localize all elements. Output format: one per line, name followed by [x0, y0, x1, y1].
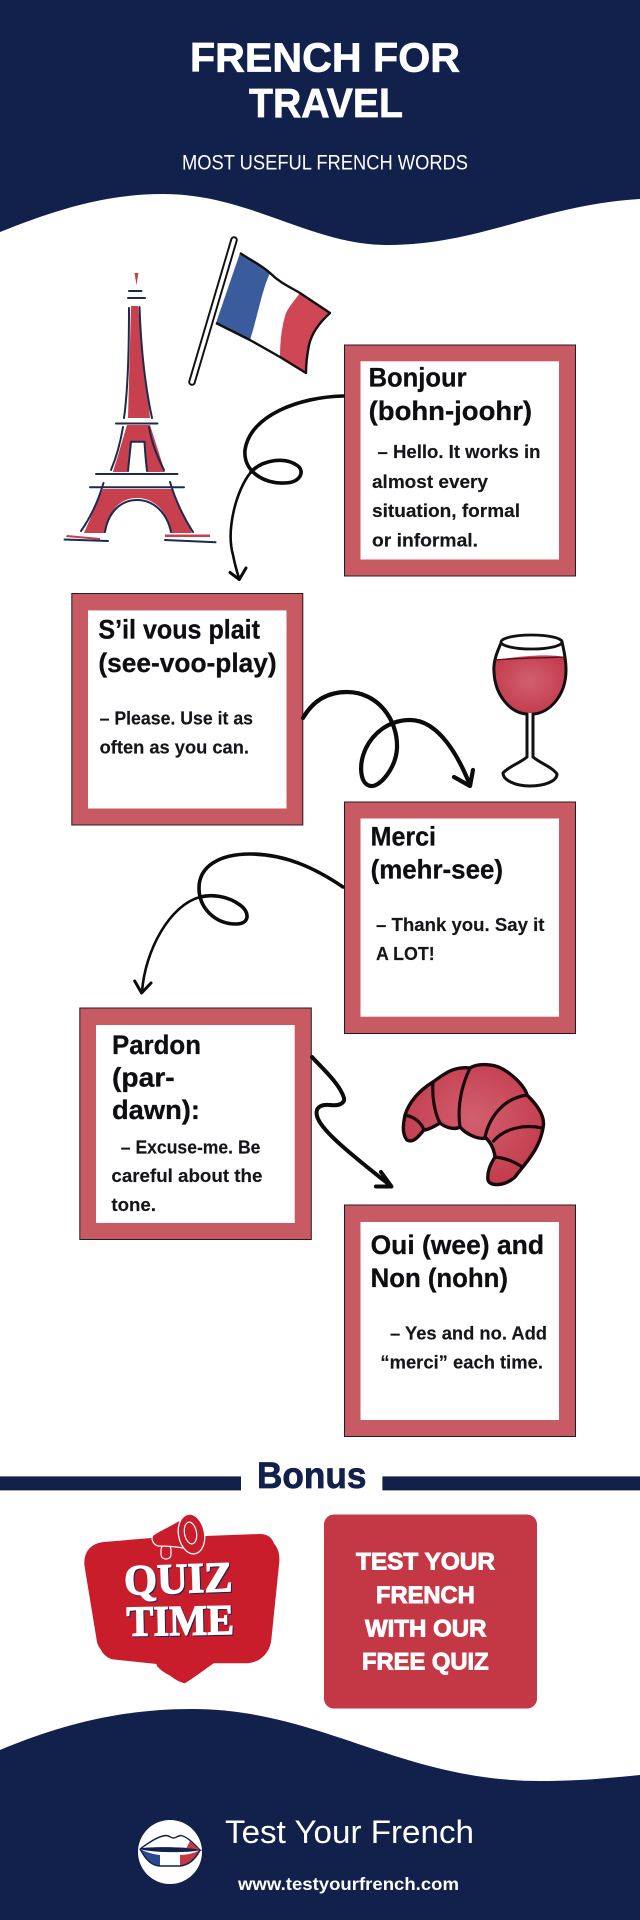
- panel: bonjour: Bonjour: [369, 362, 467, 392]
- panel: bonjour: situation, formal: [372, 501, 520, 521]
- panel: bonjour: (bohn-joohr): [369, 396, 532, 426]
- icon: eiffel tower: [64, 273, 216, 542]
- button: test your french: TEST YOUR: [356, 1550, 495, 1576]
- panel: bonjour: or informal.: [372, 530, 478, 550]
- panel: merci: – Thank you. Say it: [376, 915, 545, 935]
- panel: s'il vous plait: often as you can.: [100, 738, 249, 758]
- panel: oui et non: Non (nohn): [371, 1263, 508, 1293]
- header band: [0, 0, 640, 245]
- footer brand name: Test Your French: [225, 1814, 474, 1850]
- panel: pardon: Pardon: [112, 1030, 201, 1060]
- button: test your french: WITH OUR: [365, 1617, 486, 1643]
- panel: oui et non: Oui (wee) and: [371, 1230, 544, 1260]
- footer url: www.testyourfrench.com: [237, 1874, 459, 1894]
- panel: s'il vous plait: – Please. Use it as: [100, 708, 253, 728]
- panel: merci: Merci: [371, 821, 436, 851]
- icon: lips logo: [138, 1820, 202, 1884]
- icon: quiz time badge: TIME: [126, 1597, 234, 1646]
- icon: megaphone: [152, 1512, 208, 1559]
- subtitle: MOST USEFUL FRENCH WORDS: [182, 150, 468, 174]
- icon: wine glass: [494, 635, 566, 786]
- footer band: [0, 1709, 640, 1920]
- panel: pardon: careful about the: [111, 1166, 262, 1186]
- icon: quiz time badge: QUIZ: [123, 1554, 233, 1605]
- icon: french flag: [192, 240, 330, 382]
- panel: s'il vous plait: [72, 594, 303, 825]
- title: TRAVEL: [249, 80, 403, 126]
- title: FRENCH FOR: [190, 35, 460, 81]
- panel: merci: (mehr-see): [371, 854, 503, 884]
- heading: bonus: Bonus: [257, 1455, 366, 1496]
- panel: oui et non: “merci” each time.: [380, 1352, 543, 1372]
- button: test your french: FRENCH: [376, 1583, 475, 1609]
- panel: bonjour: [344, 345, 576, 576]
- panel: merci: [344, 802, 576, 1034]
- arrow: s'il vous plait to merci: [303, 692, 473, 786]
- panel: pardon: – Excuse-me. Be: [121, 1138, 260, 1158]
- arrow: pardon to oui non: [312, 1057, 392, 1186]
- panel: pardon: tone.: [111, 1195, 156, 1215]
- arrow: merci to pardon: [135, 854, 343, 993]
- heading: bonus: [0, 1455, 640, 1496]
- icon: croissant: [403, 1065, 544, 1185]
- panel: merci: A LOT!: [376, 944, 435, 964]
- icon: quiz time badge: [84, 1512, 280, 1684]
- panel: bonjour: almost every: [372, 472, 488, 492]
- panel: pardon: (par-: [112, 1062, 175, 1092]
- panel: pardon: dawn):: [112, 1095, 200, 1125]
- panel: oui et non: – Yes and no. Add: [390, 1324, 547, 1344]
- title: [190, 35, 460, 126]
- panel: pardon: [80, 1008, 311, 1240]
- button: test your french: FREE QUIZ: [362, 1650, 489, 1676]
- button: test your french: [324, 1514, 537, 1708]
- panel: oui et non: [344, 1205, 576, 1436]
- panel: bonjour: – Hello. It works in: [378, 442, 540, 462]
- panel: s'il vous plait: (see-voo-play): [98, 648, 277, 678]
- panel: s'il vous plait: S’il vous plait: [98, 614, 260, 644]
- arrow: bonjour to s'il vous plait: [230, 396, 343, 580]
